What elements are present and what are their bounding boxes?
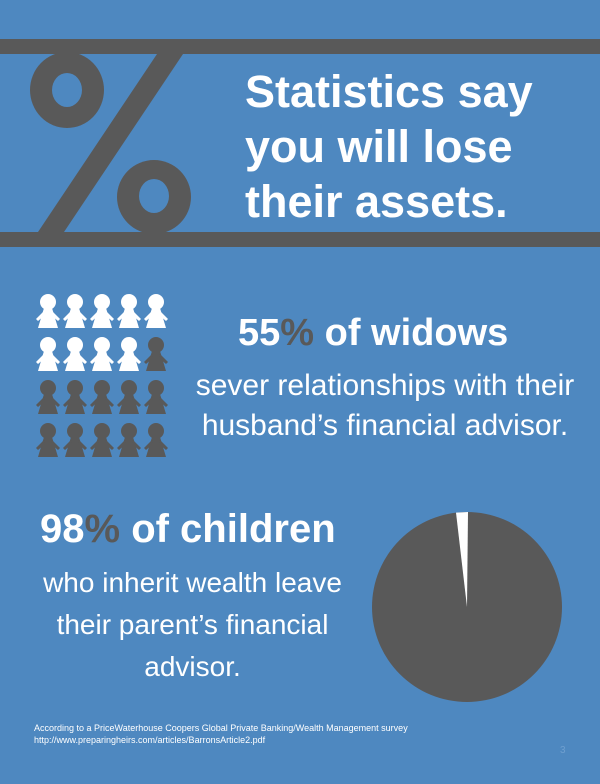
source note: http://www.preparingheirs.com/articles/BarronsArticle2.pdf [34,735,265,745]
stat 2 text [43,567,342,682]
title: Statistics say [245,66,533,117]
stat 2 text: their parent’s financial [57,609,328,640]
title: their assets. [245,176,508,227]
stat 1 text: sever relationships with their [196,369,574,402]
title [245,66,533,227]
source note: According to a PriceWaterhouse Coopers Global Private Banking/Wealth Management survey [34,723,408,733]
stat 2 text: advisor. [144,651,241,682]
source note [34,723,408,745]
stat 1 text: husband’s financial advisor. [202,409,568,442]
percent sign graphic with bars [0,39,600,247]
stat 1 text [196,369,574,442]
stat 1 heading: 55% of widows [238,312,508,354]
stat 2 heading: 98% of children [40,507,336,551]
pie chart [372,512,562,702]
stat 2 text: who inherit wealth leave [43,567,342,598]
page number: 3 [560,745,566,756]
icon grid: people [36,294,168,457]
title: you will lose [245,121,513,172]
